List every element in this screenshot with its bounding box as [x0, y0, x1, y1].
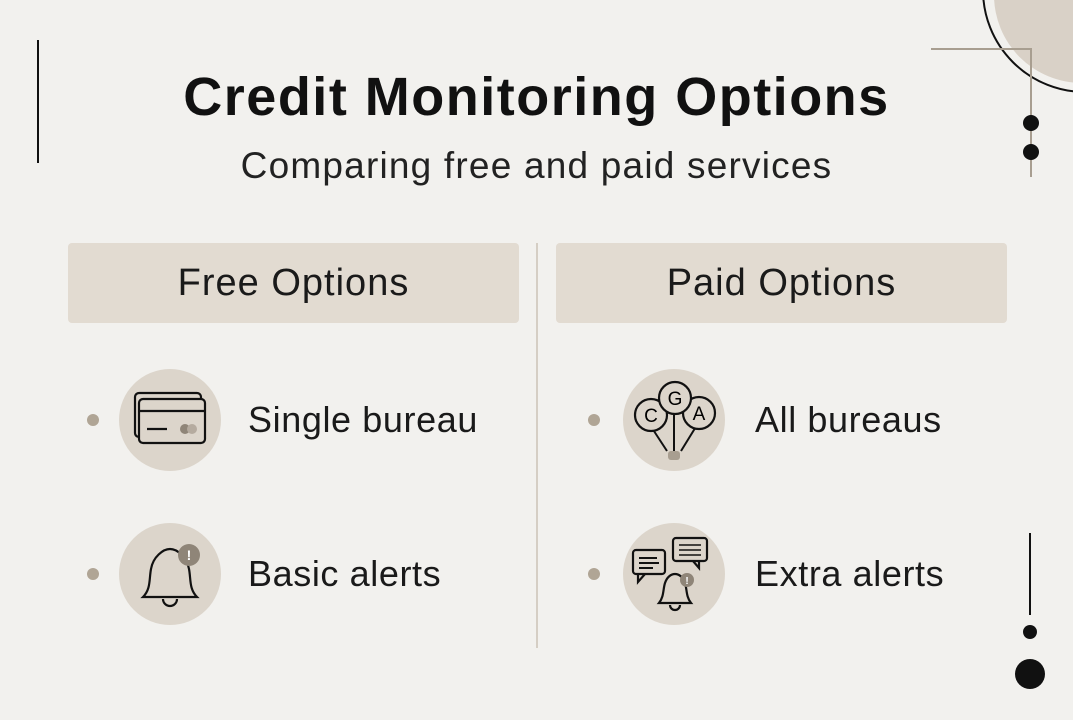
heading: paid [556, 243, 1007, 323]
text: all bureaus: All bureaus [755, 399, 942, 440]
bullet 4 [588, 568, 600, 580]
bullet 2 [87, 568, 99, 580]
icon: bell: ! [187, 547, 191, 563]
icon: bureaus balloons: G [668, 389, 682, 410]
icon: bureaus balloons: C [644, 406, 658, 427]
icon: bureaus balloons [623, 369, 725, 471]
icon: bell [119, 523, 221, 625]
icon: bureaus balloons: A [693, 404, 706, 425]
heading: free [68, 243, 519, 323]
bullet 3 [588, 414, 600, 426]
icon: extra alerts [623, 523, 725, 625]
heading: paid: Paid Options [667, 262, 896, 304]
text: extra alerts: Extra alerts [755, 553, 944, 594]
icon: credit card [119, 369, 221, 471]
title: Credit Monitoring Options [183, 67, 890, 127]
icon: extra alerts: ! [685, 576, 689, 587]
bullet 1 [87, 414, 99, 426]
text: single bureau: Single bureau [248, 399, 478, 440]
text: basic alerts: Basic alerts [248, 553, 441, 594]
subtitle: Comparing free and paid services [241, 145, 832, 186]
heading: free: Free Options [178, 262, 409, 304]
